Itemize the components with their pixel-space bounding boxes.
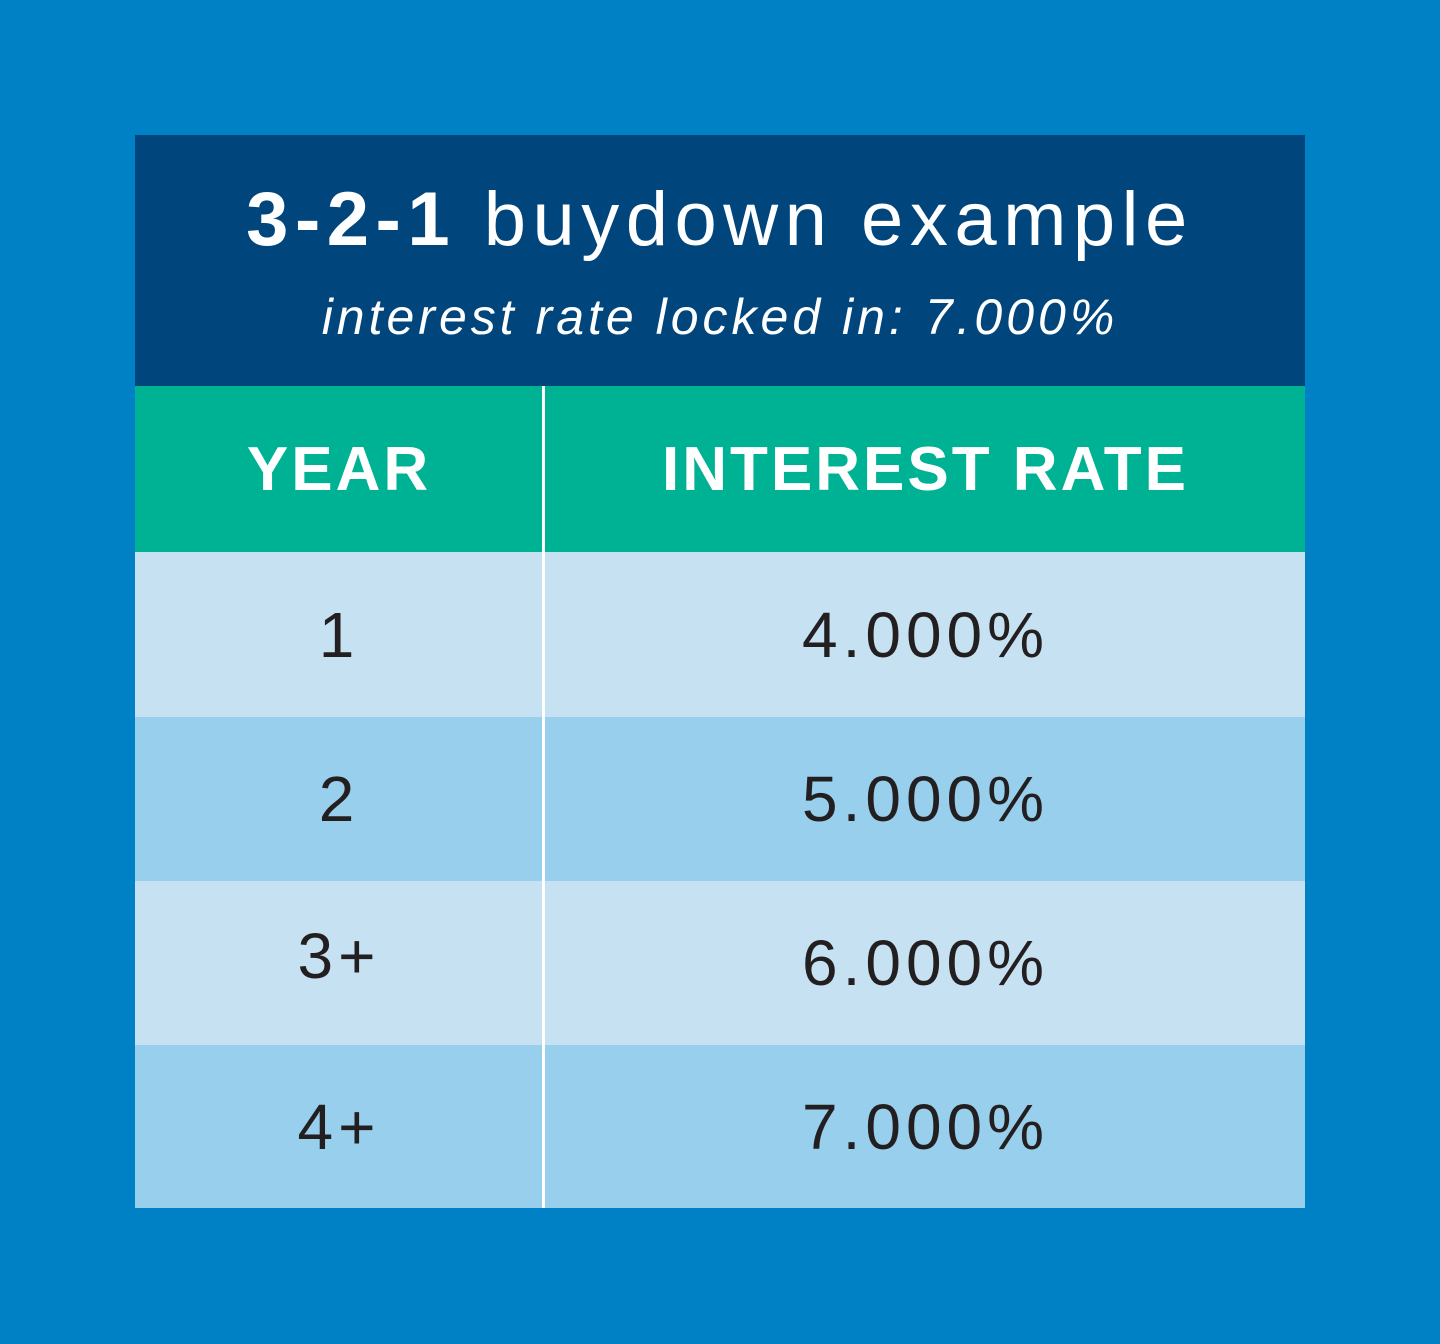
row 2 — [135, 717, 1305, 881]
row 4 — [135, 1045, 1305, 1208]
header: interest rate: INTEREST RATE — [662, 434, 1189, 504]
row 2: 5.000% — [802, 763, 1049, 835]
subtitle: interest rate locked in: 7.000% — [322, 289, 1118, 345]
row 3: 3+ — [298, 920, 380, 992]
header: title block — [135, 135, 1305, 386]
header: year: YEAR — [247, 434, 431, 504]
row 1 — [135, 552, 1305, 717]
row 3 — [135, 881, 1305, 1045]
row 1: 1 — [319, 598, 359, 670]
row 4: 4+ — [298, 1090, 380, 1162]
row 2: 2 — [319, 763, 359, 835]
column headers — [135, 386, 1305, 552]
title: 3-2-1 buydown example — [246, 177, 1194, 262]
row 4: 7.000% — [802, 1090, 1049, 1162]
row 1: 4.000% — [802, 598, 1049, 670]
row 3: 6.000% — [802, 927, 1049, 999]
table panel — [135, 135, 1305, 552]
